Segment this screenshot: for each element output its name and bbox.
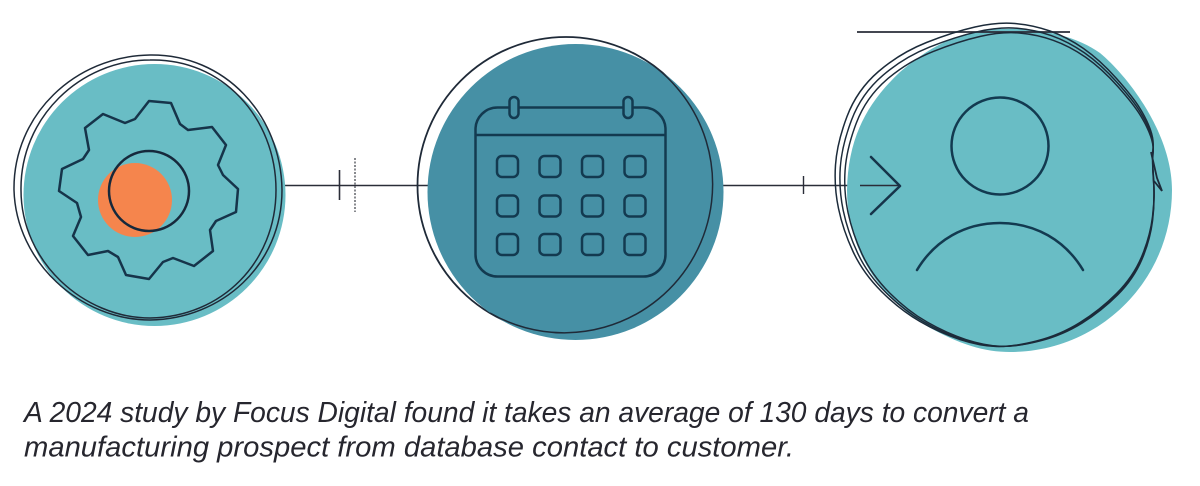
sketched outline, front (490, 52, 713, 333)
icon: person shoulders (917, 223, 1083, 270)
binding ring right (624, 97, 632, 118)
tick mark on second connector (802, 176, 804, 194)
panel: person circle (835, 23, 1172, 352)
teal blob (847, 29, 1172, 352)
connector line: calendar to person (720, 184, 860, 186)
sketched outline, back (418, 37, 714, 334)
caption (22, 397, 1029, 464)
caption line 2: manufacturing prospect from database contact to customer. (24, 432, 794, 464)
orange disc (98, 163, 172, 237)
connector line: gear to calendar (280, 170, 432, 200)
binding ring left (510, 97, 518, 118)
icon: gear (59, 101, 238, 279)
icon: person head (952, 98, 1048, 194)
arrow line (860, 184, 899, 186)
teal disc (24, 64, 286, 326)
icon: calendar (476, 97, 666, 276)
dotted tick mark (354, 158, 356, 212)
caption line 1: A 2024 study by Focus Digital found it takes an average of 130 days to convert a (22, 397, 1029, 429)
gear hub (109, 151, 189, 231)
dark teal disc (428, 44, 724, 340)
panel: calendar circle (418, 37, 724, 340)
sketched outlines (835, 23, 1162, 347)
top line (857, 31, 1070, 33)
sketched outline (14, 55, 282, 320)
header line (476, 134, 665, 136)
date squares (497, 156, 646, 255)
calendar body (476, 108, 666, 276)
arrow head (871, 157, 900, 214)
panel: gear circle (14, 55, 286, 326)
tick mark (338, 170, 340, 200)
